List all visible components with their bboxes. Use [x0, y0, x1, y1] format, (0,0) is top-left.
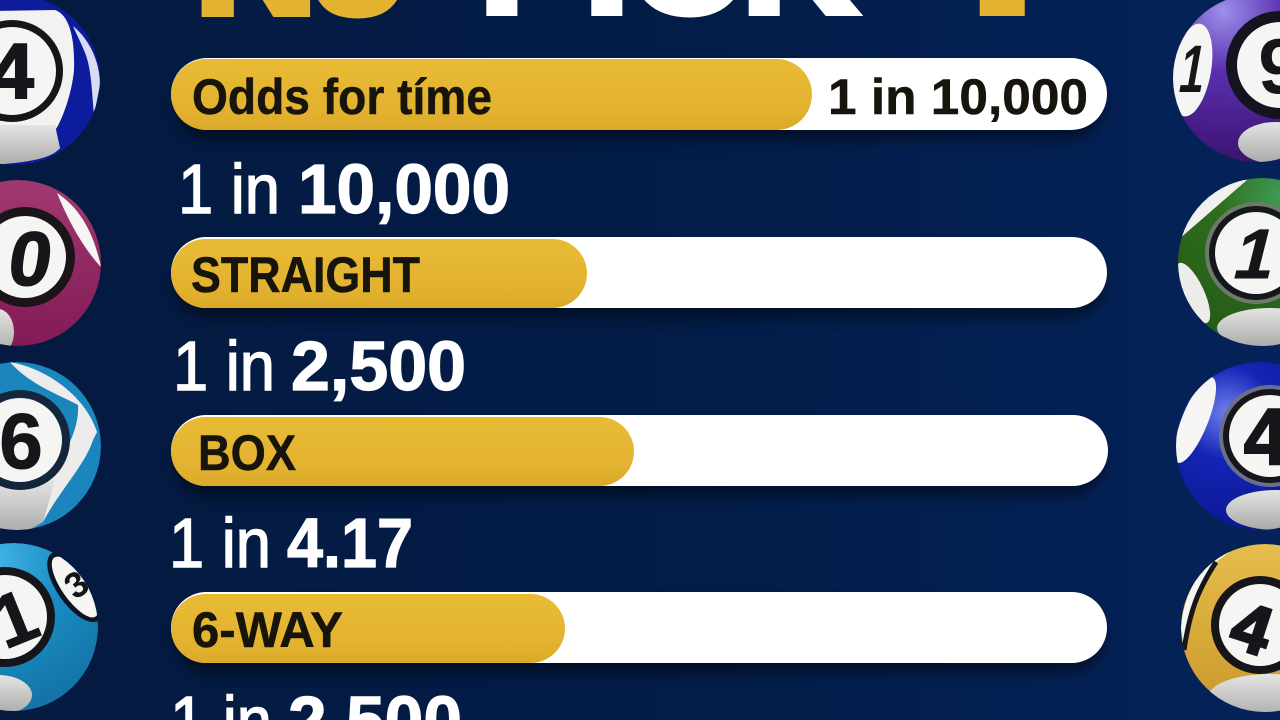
odds value: straight — [178, 150, 510, 228]
panel: odds header bar — [171, 58, 1107, 140]
icon: lottery ball 4 blue right — [1166, 362, 1280, 530]
icon: lottery ball 9 purple right — [1165, 0, 1280, 164]
icon: lottery ball 4 yellow right — [1181, 544, 1280, 720]
title: NJ Pick 4 (cropped at top) — [196, 0, 1042, 44]
panel: 6-way bar — [171, 592, 1107, 673]
icon: lottery ball 1 cyan left — [0, 543, 98, 711]
icon: lottery ball 4 blue left — [0, 0, 100, 166]
icon: lottery ball 1 green right — [1178, 178, 1280, 346]
panel: box bar — [171, 415, 1108, 496]
odds value: 6-way — [169, 504, 413, 582]
icon: lottery ball 9 purple right: 1 — [1174, 33, 1212, 107]
icon: lottery ball 0 maroon left: 0 — [3, 217, 58, 302]
value: header odds: 1 in 10,000 — [828, 69, 1088, 125]
icon: lottery ball 4 yellow right: 4 — [1222, 587, 1280, 671]
odds value: box: 2,500 — [291, 327, 466, 405]
icon: lottery ball 0 maroon left — [0, 180, 101, 355]
label: odds for time: Odds for tíme — [192, 69, 492, 125]
icon: lottery ball 6 cyan left — [0, 362, 101, 535]
odds value: 6-way: 4.17 — [287, 504, 413, 582]
odds value: 6-way: 1 in — [169, 504, 271, 582]
panel: straight bar — [171, 237, 1107, 318]
odds value: box: 1 in — [173, 327, 275, 405]
label: box: BOX — [198, 425, 296, 481]
icon: lottery ball 1 cyan left: 3 — [56, 562, 96, 607]
label: 6-way: 6-WAY — [192, 602, 343, 658]
odds value: bottom (cropped) — [170, 682, 462, 720]
odds value: straight: 1 in — [178, 150, 280, 228]
label: straight: STRAIGHT — [191, 247, 420, 303]
icon: lottery ball 6 cyan left: 6 — [0, 397, 43, 485]
odds value: straight: 10,000 — [298, 150, 510, 228]
odds value: box — [173, 327, 466, 405]
